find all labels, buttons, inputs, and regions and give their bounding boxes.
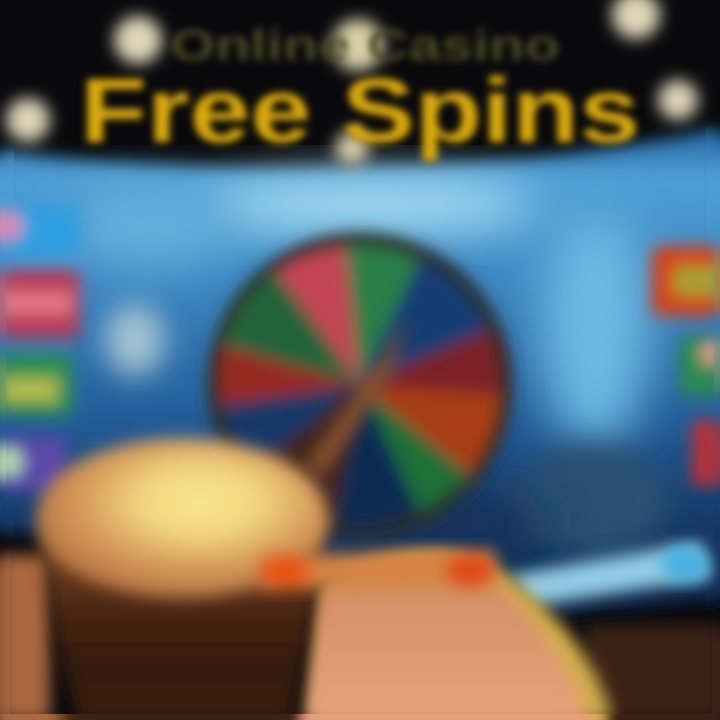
left buttons xyxy=(0,206,80,492)
light blue bar xyxy=(510,542,712,606)
decorative lights xyxy=(6,0,698,165)
wheel segments xyxy=(218,244,502,527)
wheel xyxy=(208,233,512,537)
table xyxy=(0,555,720,720)
coin cup xyxy=(36,438,328,720)
wheel pointer xyxy=(305,320,408,478)
bowl xyxy=(305,552,612,720)
title: Free Spins xyxy=(80,60,640,162)
right buttons xyxy=(652,246,720,486)
subtitle: Online Casino xyxy=(170,21,560,70)
orange strip xyxy=(259,550,496,590)
panel: blue game screen xyxy=(0,128,720,615)
bottom edge xyxy=(0,714,720,720)
